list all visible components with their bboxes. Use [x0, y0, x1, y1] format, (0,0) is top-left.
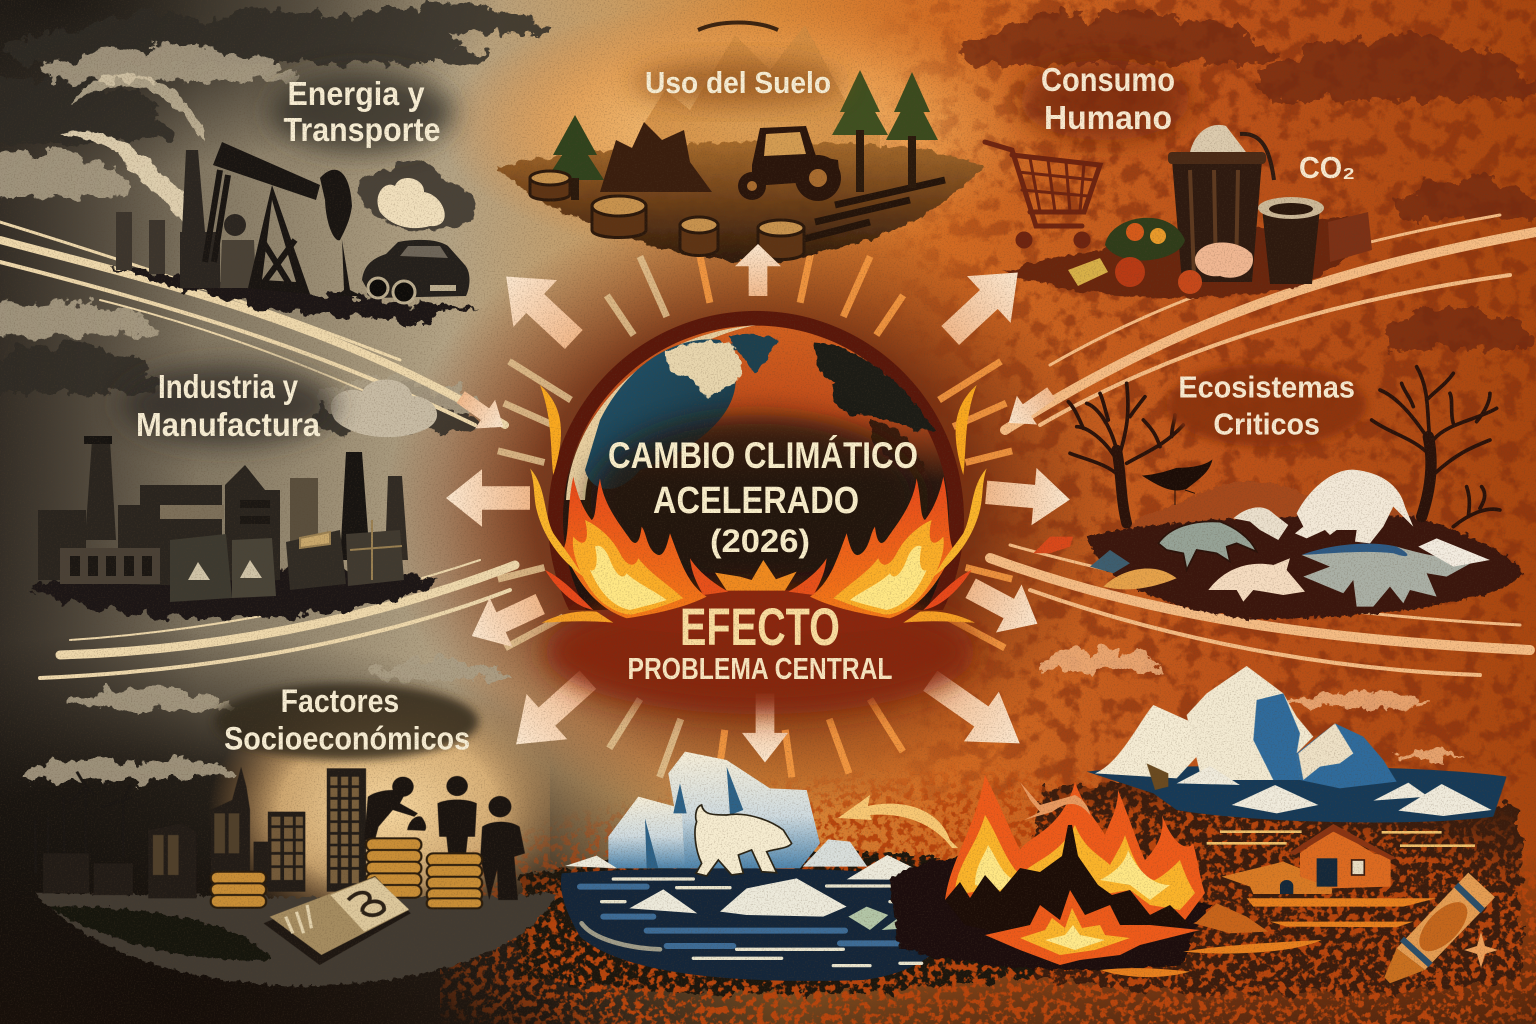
- puddles: [1100, 898, 1437, 977]
- icon: banknote book: [264, 876, 411, 965]
- icon: white wing: [1418, 538, 1490, 567]
- icon: wind turbines: [35, 772, 132, 883]
- icon: food waste: [1068, 218, 1253, 294]
- orange dust texture: [440, 730, 1536, 1024]
- main house wall: [1300, 828, 1391, 888]
- central problem: globe: [548, 311, 964, 610]
- subheading: efecto problema central: [628, 598, 892, 686]
- low house door: [1280, 880, 1293, 894]
- arrow: upper right inflow: [999, 379, 1061, 437]
- label: factores socioeconomicos: Factores: [281, 684, 399, 720]
- icon: coin stacks: [211, 838, 482, 908]
- label: factores socioeconomicos: Socioeconómicos: [224, 721, 470, 757]
- heading: cambio climatico acelerado: [608, 435, 918, 559]
- icon: dead tree right: [1372, 367, 1500, 527]
- smoke clouds, left side: [0, 3, 551, 781]
- icon: small animal: [1233, 507, 1288, 540]
- ground: [110, 268, 480, 322]
- subheading: efecto problema central: EFECTO: [680, 598, 840, 657]
- large flames: [945, 775, 1205, 920]
- icon: orange fish: [1103, 568, 1177, 589]
- effect: wildfire: [890, 775, 1210, 970]
- label: ecosistemas criticos: Criticos: [1213, 407, 1320, 442]
- icon: factory smoke: [60, 73, 205, 226]
- heading: cambio climatico acelerado: CAMBIO CLIMÁTICO: [608, 435, 918, 476]
- ground fire: [985, 890, 1200, 965]
- icon: small bin: [1258, 197, 1372, 284]
- label: factores socioeconomicos: [214, 683, 479, 760]
- effect: melting ice and polar bear: [561, 752, 963, 981]
- globe rim highlight: [566, 325, 756, 500]
- water: [1087, 766, 1507, 822]
- icon: arc above label: [698, 22, 778, 30]
- icon: factory skyline: [38, 436, 408, 585]
- icon: distant forest: [640, 25, 880, 150]
- icon: bird back: [1302, 544, 1407, 556]
- icon: window bars: [270, 787, 364, 868]
- icon: smoke: [331, 380, 437, 437]
- arrow: to ecosistemas criticos: [984, 464, 1072, 528]
- door: [1317, 858, 1337, 887]
- dark scorched earth, lower right: [520, 780, 1520, 994]
- panel: consumo humano: [985, 60, 1372, 298]
- ground: [30, 569, 440, 618]
- arrow: lower left side: [460, 579, 552, 661]
- label: consumo humano: [1020, 60, 1190, 140]
- smoke clouds, right side: [959, 10, 1536, 761]
- icon: crow: [1143, 461, 1212, 505]
- flame core: [955, 815, 1195, 910]
- arrow: to energia y transporte: [484, 253, 596, 363]
- icon: main peak: [1187, 666, 1313, 780]
- icon: polar bear carcass: [1295, 470, 1413, 543]
- icon: building windows: [153, 777, 359, 883]
- ground: [36, 893, 557, 986]
- icon: red leaves: [1033, 537, 1073, 553]
- icon: cargo crates: [170, 520, 404, 602]
- arrow: to factores socioeconomicos: [496, 657, 608, 767]
- icon: smoke stacks: [116, 150, 256, 288]
- label: ecosistemas criticos: [1167, 363, 1367, 447]
- icon: people: [364, 776, 525, 900]
- icon: ice crevice: [645, 767, 743, 868]
- ground mound: [498, 142, 984, 264]
- panel: ecosistemas criticos: [1033, 363, 1523, 620]
- low collapsed house: [1222, 862, 1333, 894]
- ground fire highlight: [1045, 925, 1105, 950]
- ground mound: [1005, 215, 1356, 298]
- icon: warehouse windows: [70, 500, 270, 576]
- globe ring: [548, 311, 964, 610]
- arrow: lower right side: [958, 564, 1050, 648]
- label: industria y manufactura: Manufactura: [136, 406, 321, 443]
- icon: dead bird: [1302, 545, 1477, 607]
- continent: south asia: [870, 420, 925, 472]
- icon: floating ice: [1177, 766, 1492, 816]
- label: consumo humano: Humano: [1044, 99, 1172, 136]
- field furrows: [800, 180, 945, 240]
- window: [1352, 860, 1364, 875]
- continent: north america: [664, 342, 742, 400]
- heading: cambio climatico acelerado: (2026): [710, 523, 810, 559]
- label: energia y transporte: Energia y: [288, 75, 425, 112]
- heading: cambio climatico acelerado: ACELERADO: [653, 480, 859, 522]
- label: industria y manufactura: [120, 365, 336, 445]
- effect: distant iceberg: [1087, 666, 1507, 822]
- arrow: curved between wildfire and ice: [838, 795, 958, 848]
- panel: factores socioeconomicos: [35, 683, 557, 986]
- icon: crayon: [1384, 873, 1495, 983]
- icon: left peak: [1095, 705, 1205, 778]
- arrow: upper left inflow: [451, 383, 513, 441]
- arrow: down to melting ice: [742, 694, 788, 762]
- label: industria y manufactura: Industria y: [158, 368, 299, 405]
- subheading: efecto problema central: PROBLEMA CENTRAL: [628, 651, 892, 686]
- label: ecosistemas criticos: Ecosistemas: [1178, 369, 1355, 404]
- ground: [1087, 481, 1523, 620]
- label: uso del suelo: Uso del Suelo: [645, 65, 831, 100]
- icon: tractor: [738, 126, 841, 201]
- panel: energia y transporte: [60, 72, 480, 322]
- label: energia y transporte: [270, 72, 454, 152]
- icon: tree stumps: [530, 171, 804, 260]
- icon: trash can: [1168, 125, 1274, 282]
- continent: greenland: [728, 335, 778, 372]
- icon: pale animal: [1208, 558, 1305, 602]
- icon: front iceberg: [608, 797, 685, 868]
- icon: smoke cloud over car: [358, 160, 475, 231]
- icon: back iceberg: [668, 752, 820, 868]
- water ripples: [580, 879, 958, 966]
- arrow: to industria y manufactura: [446, 469, 530, 527]
- icon: peak shadow: [1253, 693, 1300, 780]
- icon: blue fish tail: [1090, 550, 1130, 573]
- icon: ice floes: [565, 839, 938, 917]
- sunburst rays: [498, 246, 1012, 777]
- continent: eurasia: [814, 342, 935, 431]
- ground fire core: [1020, 908, 1130, 955]
- icon: right peak snow: [1298, 723, 1353, 780]
- icon: burnt forest silhouette: [945, 825, 1190, 940]
- icon: city skyline: [43, 767, 366, 898]
- globe sphere: [563, 326, 949, 610]
- flames around the globe: [530, 385, 987, 623]
- icon: green debris: [848, 907, 908, 930]
- icon: debris leaf: [1147, 763, 1168, 790]
- icon: oil pumpjack: [205, 142, 362, 296]
- icon: dead tree left: [1068, 383, 1183, 523]
- ocean: [585, 339, 736, 489]
- icon: polar bear: [695, 805, 792, 876]
- icon: car: [362, 240, 470, 303]
- flame highlight: [975, 845, 1170, 900]
- icon: large stump: [600, 122, 712, 192]
- panel: uso del suelo: [498, 22, 984, 264]
- label: co2: CO₂: [1299, 150, 1355, 185]
- icon: right peak: [1297, 723, 1397, 788]
- icon: sparkle: [1464, 932, 1498, 968]
- burnt dark centre: [590, 415, 920, 585]
- label: consumo humano: Consumo: [1041, 61, 1175, 98]
- ripples: [1207, 832, 1475, 846]
- ground shadow: [46, 906, 271, 960]
- icon: burning house: [1100, 824, 1475, 977]
- arrow: to uso del suelo: [735, 244, 781, 296]
- wind swooshes: [0, 215, 1536, 678]
- arrow: to consumo humano: [928, 249, 1040, 359]
- label: energia y transporte: Transporte: [284, 111, 440, 148]
- icon: trees: [546, 70, 938, 200]
- water: [561, 868, 963, 981]
- panel: industria y manufactura: [30, 365, 440, 618]
- arrows radiating from the globe: [446, 244, 1072, 768]
- panel: efecto banner: [545, 590, 975, 714]
- arrow: to wildfire: [913, 656, 1037, 768]
- icon: shopping cart: [985, 142, 1100, 246]
- main house roof: [1288, 824, 1397, 860]
- scorched mound: [890, 858, 1210, 970]
- icon: fish: [1158, 521, 1257, 570]
- icon: embers bird: [1020, 782, 1090, 820]
